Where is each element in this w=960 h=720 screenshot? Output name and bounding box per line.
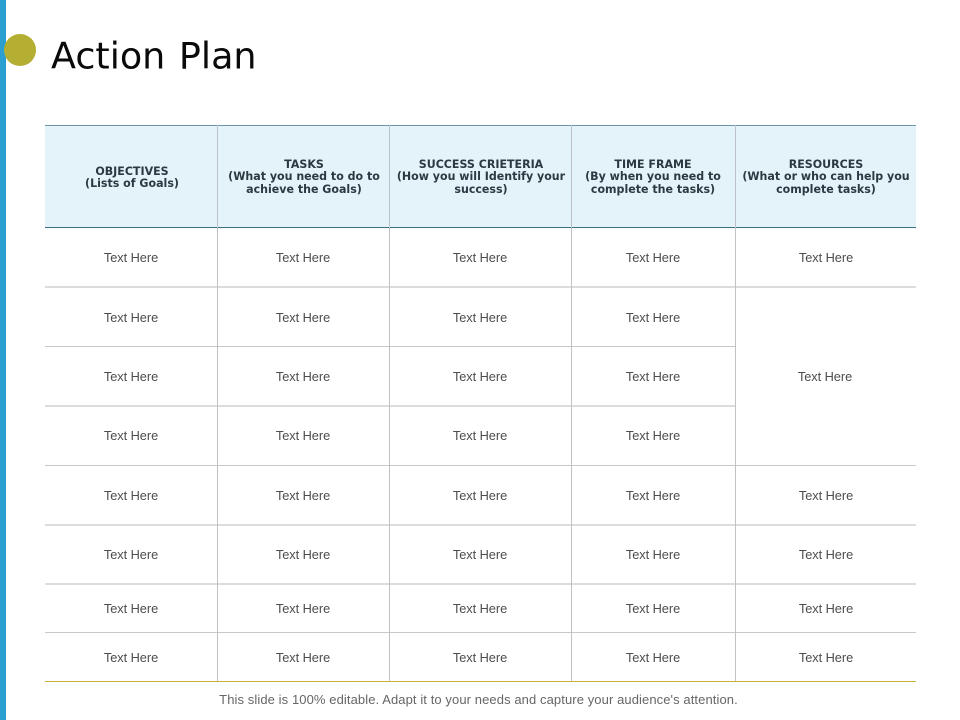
header: time frame: TIME FRAME (614, 158, 692, 171)
row 2: Text Here (104, 310, 158, 325)
row 7: Text Here (626, 601, 680, 616)
row 8 (104, 650, 853, 665)
row 6: Text Here (799, 547, 853, 562)
header row background (45, 125, 916, 227)
header: time frame: (By when you need to (585, 170, 721, 183)
header: tasks: (What you need to do to (228, 170, 380, 183)
left accent bar (0, 0, 6, 720)
row 8: Text Here (453, 650, 507, 665)
row 7 (104, 601, 853, 616)
row 8: Text Here (276, 650, 330, 665)
row 3 with merged resources cell: Text Here (798, 369, 852, 384)
row 5: Text Here (276, 488, 330, 503)
header: resources: complete tasks) (776, 183, 876, 196)
row 7: Text Here (276, 601, 330, 616)
row 5 (104, 488, 853, 503)
row 6: Text Here (276, 547, 330, 562)
row 4: Text Here (453, 428, 507, 443)
header: success criteria: SUCCESS CRIETERIA (419, 158, 544, 171)
row 1: Text Here (799, 250, 853, 265)
row 5: Text Here (453, 488, 507, 503)
row 3 with merged resources cell: Text Here (104, 369, 158, 384)
row 1 (104, 250, 853, 265)
row 1: Text Here (276, 250, 330, 265)
row 3 with merged resources cell: Text Here (276, 369, 330, 384)
header: objectives: (Lists of Goals) (85, 177, 179, 190)
header: resources: RESOURCES (789, 158, 863, 171)
title: Action Plan (51, 34, 257, 78)
row 3 with merged resources cell: Text Here (453, 369, 507, 384)
row 6 (104, 547, 853, 562)
row 8: Text Here (799, 650, 853, 665)
row 8: Text Here (626, 650, 680, 665)
table: action plan (45, 125, 916, 682)
row 2: Text Here (453, 310, 507, 325)
row 6: Text Here (626, 547, 680, 562)
row 7: Text Here (104, 601, 158, 616)
row 3 with merged resources cell: Text Here (626, 369, 680, 384)
row 8: Text Here (104, 650, 158, 665)
row 4: Text Here (104, 428, 158, 443)
row 4: Text Here (626, 428, 680, 443)
row 5: Text Here (104, 488, 158, 503)
header: resources: (What or who can help you (742, 170, 910, 183)
row 2: Text Here (626, 310, 680, 325)
row 1: Text Here (453, 250, 507, 265)
row 2: Text Here (276, 310, 330, 325)
row 5: Text Here (626, 488, 680, 503)
row 7: Text Here (453, 601, 507, 616)
header: success criteria: success) (454, 183, 508, 196)
row 2 (104, 310, 680, 325)
row 1: Text Here (104, 250, 158, 265)
row 4: Text Here (276, 428, 330, 443)
row 4 (104, 428, 680, 443)
header: success criteria: (How you will Identify your (397, 170, 566, 183)
header: tasks: achieve the Goals) (246, 183, 362, 196)
row 7: Text Here (799, 601, 853, 616)
icon: title bullet circle (4, 34, 36, 66)
header: tasks: TASKS (284, 158, 324, 171)
footer note: This slide is 100% editable. Adapt it to your needs and capture your audience's attention. (219, 692, 738, 707)
header: objectives: OBJECTIVES (95, 165, 169, 178)
row 6: Text Here (104, 547, 158, 562)
row 3 with merged resources cell (104, 369, 852, 384)
row 6: Text Here (453, 547, 507, 562)
header: time frame: complete the tasks) (591, 183, 715, 196)
row 1: Text Here (626, 250, 680, 265)
row 5: Text Here (799, 488, 853, 503)
